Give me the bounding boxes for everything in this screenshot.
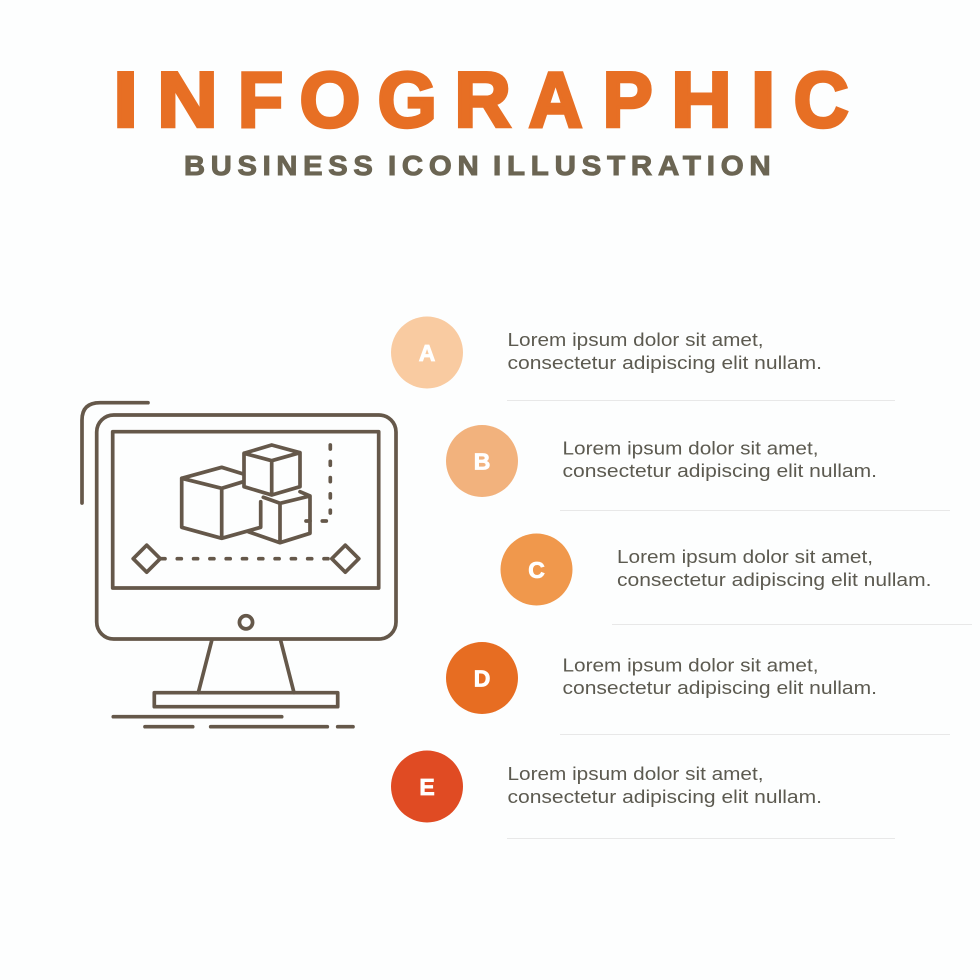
text E xyxy=(508,763,822,807)
badge A xyxy=(391,316,463,388)
horizontal dashed motion path xyxy=(161,557,331,561)
monitor body xyxy=(97,415,396,639)
badge C xyxy=(500,534,572,606)
title: I xyxy=(113,56,138,143)
right cube xyxy=(248,492,310,543)
subtitle: ICON xyxy=(388,150,484,181)
icon: computer monitor with 3D cubes xyxy=(82,403,396,727)
badge C: C xyxy=(528,557,545,583)
power button xyxy=(239,616,253,629)
text B: Lorem ipsum dolor sit amet, xyxy=(562,438,818,458)
ground lines xyxy=(113,717,353,727)
badge E xyxy=(391,750,463,822)
item C xyxy=(500,534,972,624)
text E: consectetur adipiscing elit nullam. xyxy=(508,786,822,807)
text C: Lorem ipsum dolor sit amet, xyxy=(617,546,873,567)
title: R xyxy=(454,56,511,144)
monitor stand xyxy=(198,641,294,693)
text A: Lorem ipsum dolor sit amet, xyxy=(508,329,764,350)
top cube xyxy=(244,445,300,495)
text D: consectetur adipiscing elit nullam. xyxy=(562,677,877,698)
monitor base xyxy=(154,693,338,707)
item B xyxy=(446,425,950,510)
subtitle xyxy=(184,150,776,181)
text B xyxy=(562,438,877,481)
subtitle: ILLUSTRATION xyxy=(493,150,776,181)
title: P xyxy=(603,57,652,144)
item D xyxy=(446,642,950,734)
text C: consectetur adipiscing elit nullam. xyxy=(617,569,932,590)
title: G xyxy=(378,57,437,144)
monitor corner accent xyxy=(82,403,148,503)
title: N xyxy=(157,57,218,144)
text C xyxy=(617,546,932,590)
title: H xyxy=(671,57,732,144)
text A xyxy=(508,329,822,373)
right diamond handle xyxy=(332,545,359,572)
badge E: E xyxy=(419,774,435,800)
text D: Lorem ipsum dolor sit amet, xyxy=(562,654,818,676)
title xyxy=(113,56,849,144)
horizontal short dashed guide xyxy=(306,519,327,523)
title: F xyxy=(238,57,283,144)
item E xyxy=(391,750,895,838)
text A: consectetur adipiscing elit nullam. xyxy=(508,352,822,373)
title: C xyxy=(794,57,849,144)
title: A xyxy=(529,57,582,144)
text D xyxy=(562,654,877,698)
badge D: D xyxy=(474,666,490,692)
large cube xyxy=(182,467,261,538)
badge B: B xyxy=(474,448,490,474)
text B: consectetur adipiscing elit nullam. xyxy=(562,460,877,481)
title: O xyxy=(300,56,360,144)
item A xyxy=(391,316,895,400)
badge B xyxy=(446,425,518,497)
subtitle: BUSINESS xyxy=(184,150,378,181)
text E: Lorem ipsum dolor sit amet, xyxy=(508,763,764,784)
badge D xyxy=(446,642,518,714)
vertical dashed guide xyxy=(328,445,332,513)
left diamond handle xyxy=(133,545,160,572)
monitor screen xyxy=(113,432,379,588)
title: I xyxy=(751,56,775,143)
badge A: A xyxy=(419,340,435,366)
